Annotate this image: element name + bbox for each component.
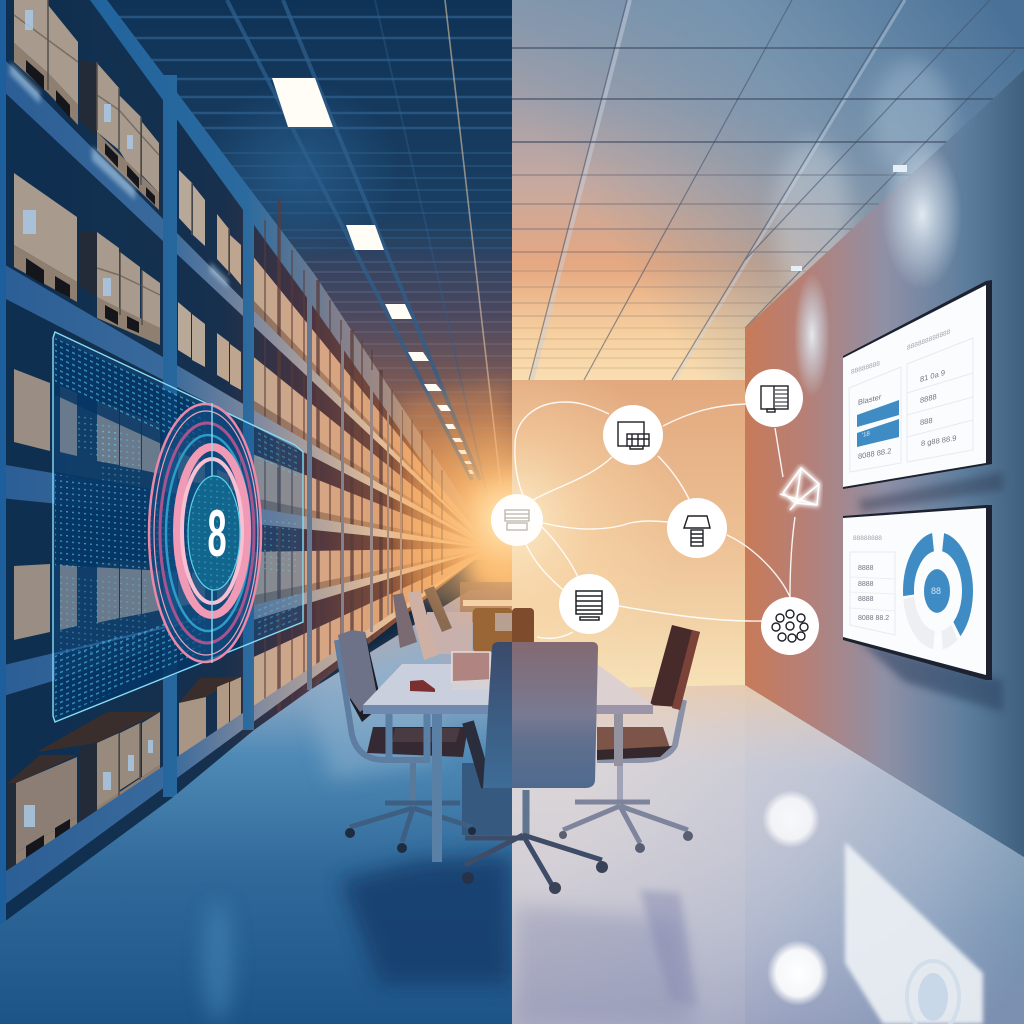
- shelf beams: [0, 55, 490, 908]
- right wall: [745, 70, 1024, 857]
- donut chart: [897, 522, 979, 660]
- lower screen labels: 8088 88.2: [858, 615, 889, 622]
- hologram ring target: [148, 403, 262, 663]
- donut center label: 88: [931, 586, 941, 596]
- screen labels: Blaster: [858, 392, 882, 407]
- left ceiling: [107, 0, 512, 560]
- bar chart: [857, 400, 899, 447]
- node: document list: [559, 574, 619, 634]
- central glow on back wall: [512, 381, 634, 600]
- panel: lower wall screen: [843, 505, 1003, 712]
- box labels: [23, 10, 153, 827]
- shelf ceiling rail: [90, 0, 470, 518]
- node: network mesh: [761, 597, 819, 655]
- screen labels: '18: [862, 430, 870, 439]
- panel: upper wall screen: [843, 280, 1003, 512]
- node: faded document: [491, 494, 543, 546]
- row five boxes: [16, 677, 241, 853]
- floor shadow of table: [340, 855, 512, 985]
- near bay boxes: [8, 0, 241, 878]
- floor reflections: [204, 620, 440, 1020]
- node: monitor: [745, 369, 803, 427]
- hologram number: 8: [207, 497, 227, 571]
- central aisle glow: [399, 411, 512, 622]
- right floor: [512, 685, 1024, 1024]
- screen labels: 88888888: [851, 360, 880, 376]
- left half: warehouse: [0, 0, 530, 1024]
- beam highlights: [10, 62, 228, 288]
- node: computer terminal: [603, 405, 663, 465]
- node: server stack: [667, 498, 727, 558]
- ceiling lights: [272, 78, 474, 474]
- shelf uprights: [0, 0, 402, 925]
- dark box sides: [8, 60, 97, 878]
- screen labels: 888888888888: [907, 328, 951, 352]
- lower screen labels: 8888: [858, 596, 874, 603]
- row two boxes: [14, 173, 241, 390]
- hologram panel: [53, 332, 303, 722]
- under table block: [462, 763, 512, 835]
- shelving wall backdrop: [0, 0, 490, 935]
- floor reflections: [515, 790, 983, 1024]
- table: [363, 664, 653, 862]
- row one boxes: [14, 0, 241, 285]
- back chair: [473, 608, 534, 652]
- row four boxes: [14, 557, 241, 640]
- screen labels: 8888: [920, 392, 937, 405]
- phone: [410, 680, 435, 692]
- warm aisle wash: [400, 380, 512, 620]
- icon: glowing star polyhedron: [780, 468, 819, 510]
- right half: meeting room: [512, 0, 1024, 1024]
- screen labels: 81 0a 9: [920, 368, 945, 384]
- left chair: [337, 630, 476, 853]
- row five box lids: [8, 677, 241, 783]
- aisle end: shelves fade into light: [455, 475, 512, 590]
- right ceiling: [512, 0, 1024, 380]
- lower screen labels: 8888: [858, 581, 874, 588]
- box dividers: [14, 0, 229, 800]
- row three boxes: [14, 369, 241, 492]
- screen labels: 8088 88.2: [858, 446, 891, 461]
- back wall: [512, 380, 745, 692]
- distant office furniture: [393, 582, 512, 660]
- laptop: [452, 652, 490, 690]
- lower screen labels: 88888888: [853, 535, 882, 542]
- left floor: [0, 590, 512, 1024]
- pallets: [14, 43, 160, 864]
- right chair: [559, 625, 700, 853]
- front chair: [462, 642, 608, 894]
- network connection lines: [515, 402, 795, 638]
- meeting table group: [337, 608, 700, 894]
- screen labels: 8 g88 88.9: [921, 433, 956, 448]
- lower screen labels: 8888: [858, 565, 874, 572]
- distant box rows: [254, 200, 468, 714]
- screen labels: 888: [920, 416, 932, 427]
- screen labels: [851, 328, 956, 461]
- pallet holes: [26, 60, 155, 858]
- lower screen labels: [853, 535, 889, 622]
